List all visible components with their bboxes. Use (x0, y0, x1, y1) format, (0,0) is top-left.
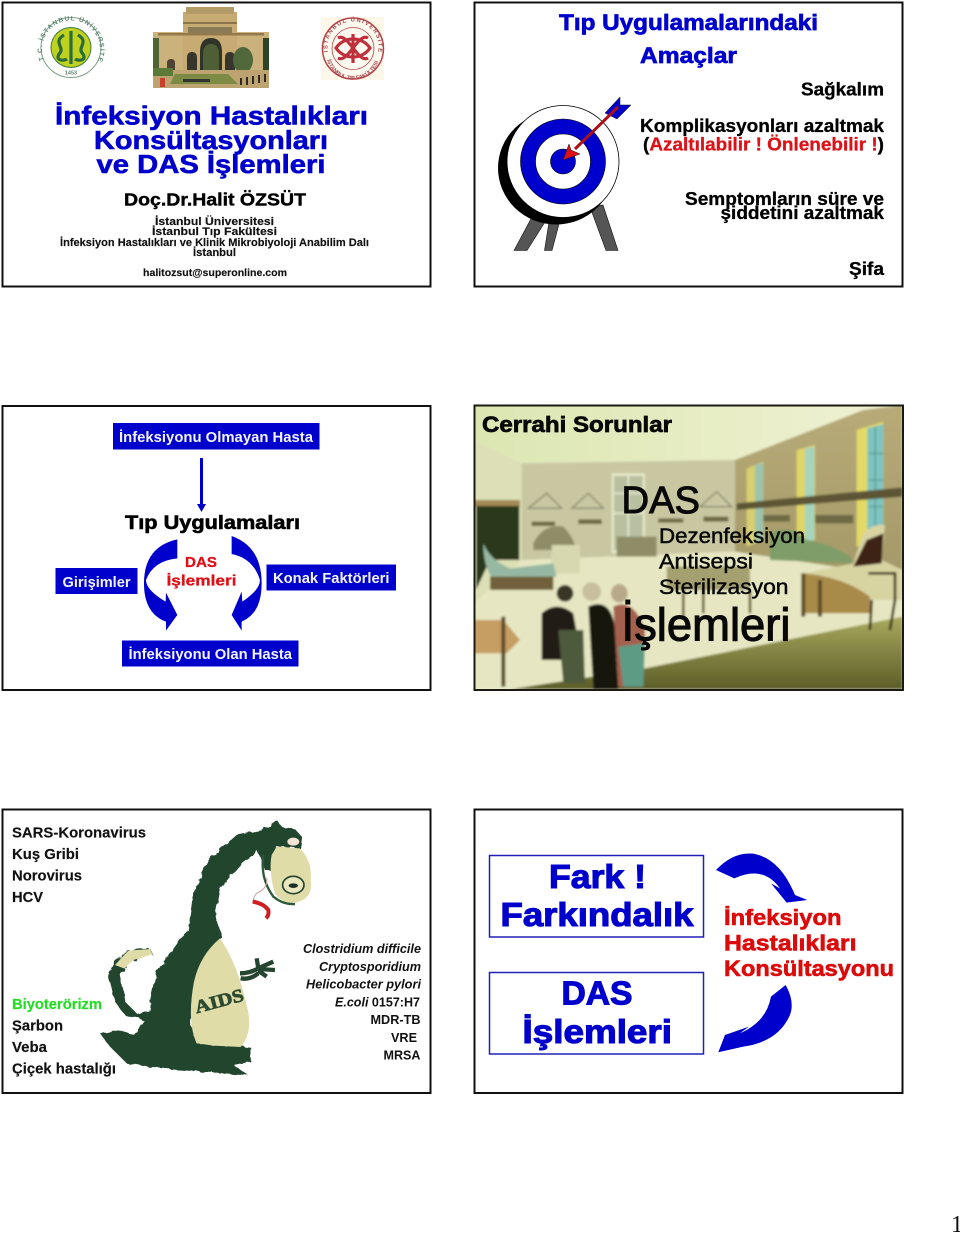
text: infectious diseases consultation: Konsültasyonu (724, 956, 894, 981)
list: resistant bacteria: VRE (391, 1030, 417, 1045)
box: patient without infection: İnfeksiyonu Olmayan Hasta (119, 429, 314, 446)
heading: medical practices: Tıp Uygulamaları (125, 513, 300, 534)
list: resistant bacteria: Clostridium difficile (303, 941, 421, 956)
title: İnfeksiyon Hastalıkları (55, 100, 368, 130)
list: bioterrorism: Şarbon (12, 1018, 63, 1034)
panel: infection flow diagram (2, 406, 430, 690)
arrow: down (197, 458, 206, 512)
panel: goals of medical practice (474, 2, 902, 286)
box: awareness (490, 856, 704, 937)
list: resistant bacteria: E.coli 0157:H7 (335, 994, 420, 1010)
author name: Doç.Dr.Halit ÖZSÜT (124, 190, 306, 210)
box: DAS procedures: DAS (562, 974, 632, 1012)
list: resistant bacteria: MDR-TB (370, 1012, 420, 1027)
title (55, 100, 368, 179)
box: DAS procedures: İşlemleri (522, 1013, 672, 1050)
icon: Istanbul University seal (38, 16, 106, 78)
panel: awareness and consultation (474, 810, 902, 1093)
box: awareness: Fark ! (549, 858, 646, 895)
box: awareness: Farkındalık (500, 896, 694, 933)
box: DAS procedures (490, 972, 704, 1054)
text: DAS procedures list: DAS (622, 480, 700, 522)
heading (559, 10, 818, 68)
email: halitozsut@superonline.com (143, 267, 287, 279)
icon: Istanbul Medical Faculty seal (321, 16, 384, 80)
list: resistant bacteria: MRSA (384, 1048, 421, 1062)
text: DAS procedures list (622, 480, 805, 650)
box: patient without infection (113, 423, 320, 450)
list: bioterrorism: Çiçek hastalığı (12, 1062, 116, 1078)
text: infectious diseases consultation (724, 905, 894, 981)
list: bioterrorism: Biyoterörizm (12, 997, 102, 1013)
box: interventions (56, 568, 138, 594)
arrow: right curved (232, 536, 262, 631)
text: infectious diseases consultation: İnfeksiyon (724, 905, 842, 930)
list: emerging viruses: Norovirus (12, 868, 82, 884)
affiliation: İstanbul (193, 246, 236, 259)
goal: reduce symptoms (685, 189, 885, 223)
text: DAS procedures list: Antisepsi (659, 550, 753, 574)
arrow: left curved (144, 539, 177, 631)
icon: target with arrow (498, 97, 631, 250)
label: DAS procedures (166, 554, 236, 590)
title: ve DAS İşlemleri (96, 149, 326, 179)
affiliation: İstanbul Tıp Fakültesi (152, 225, 277, 238)
list: resistant bacteria: Cryptosporidium (319, 959, 421, 974)
affiliation: İstanbul Üniversitesi (155, 215, 274, 228)
list: emerging viruses: HCV (12, 890, 43, 906)
panel: pathogens and AIDS dragon (2, 810, 430, 1093)
affiliation: İnfeksiyon Hastalıkları ve Klinik Mikrobiyoloji Anabilim Dalı (60, 236, 369, 249)
list: bioterrorism: Veba (12, 1040, 48, 1056)
arrow: top curved (716, 853, 807, 903)
title: Konsültasyonları (94, 125, 328, 155)
icon: Istanbul University seal: 1453 (65, 70, 77, 76)
goal: cure: Şifa (849, 259, 885, 279)
list: emerging viruses (12, 826, 146, 906)
arrow: bottom curved (718, 985, 792, 1052)
icon: university gate building (153, 7, 269, 88)
goal: survival: Sağkalım (801, 80, 884, 100)
label: DAS procedures: İşlemleri (166, 572, 236, 590)
text: DAS procedures list: İşlemleri (622, 598, 790, 650)
list: emerging viruses: Kuş Gribi (12, 847, 79, 863)
box: patient with infection (122, 640, 298, 666)
list: resistant bacteria: Helicobacter pylori (306, 976, 421, 992)
illustration: hospital ward painting (474, 405, 903, 689)
text: infectious diseases consultation: Hastalıkları (724, 930, 856, 956)
icon: Istanbul Medical Faculty seal: İSTANBUL TIP FAKÜLTESİ (327, 59, 378, 80)
goal: reduce complications: (Azaltılabilir ! Önlenebilir ! ) (643, 134, 884, 154)
heading: Cerrahi Sorunlar (482, 412, 672, 437)
panel: title slide (2, 2, 432, 288)
heading: Amaçlar (640, 43, 737, 68)
goal: reduce complications (640, 116, 885, 154)
text: DAS procedures list: Dezenfeksiyon (659, 525, 805, 548)
label: DAS procedures: DAS (185, 554, 217, 571)
affiliation (60, 215, 369, 259)
goal: reduce complications: Komplikasyonları azaltmak (640, 116, 885, 136)
box: host factors (266, 564, 396, 590)
list: emerging viruses: SARS-Koronavirus (12, 826, 146, 842)
box: host factors: Konak Faktörleri (273, 571, 390, 587)
box: interventions: Girişimler (62, 575, 131, 591)
list: bioterrorism (12, 997, 116, 1078)
illustration: AIDS dragon: AIDS (193, 985, 246, 1017)
heading: Tıp Uygulamalarındaki (559, 10, 818, 35)
list: resistant bacteria (303, 941, 421, 1062)
goal: reduce symptoms: şiddetini azaltmak (720, 203, 885, 223)
illustration: AIDS dragon (100, 820, 311, 1075)
panel: surgical problems hospital ward (474, 405, 903, 690)
goal: reduce symptoms: Semptomların süre ve (685, 189, 884, 209)
box: patient with infection: İnfeksiyonu Olan Hasta (128, 646, 293, 663)
text: DAS procedures list: Sterilizasyon (659, 576, 788, 599)
